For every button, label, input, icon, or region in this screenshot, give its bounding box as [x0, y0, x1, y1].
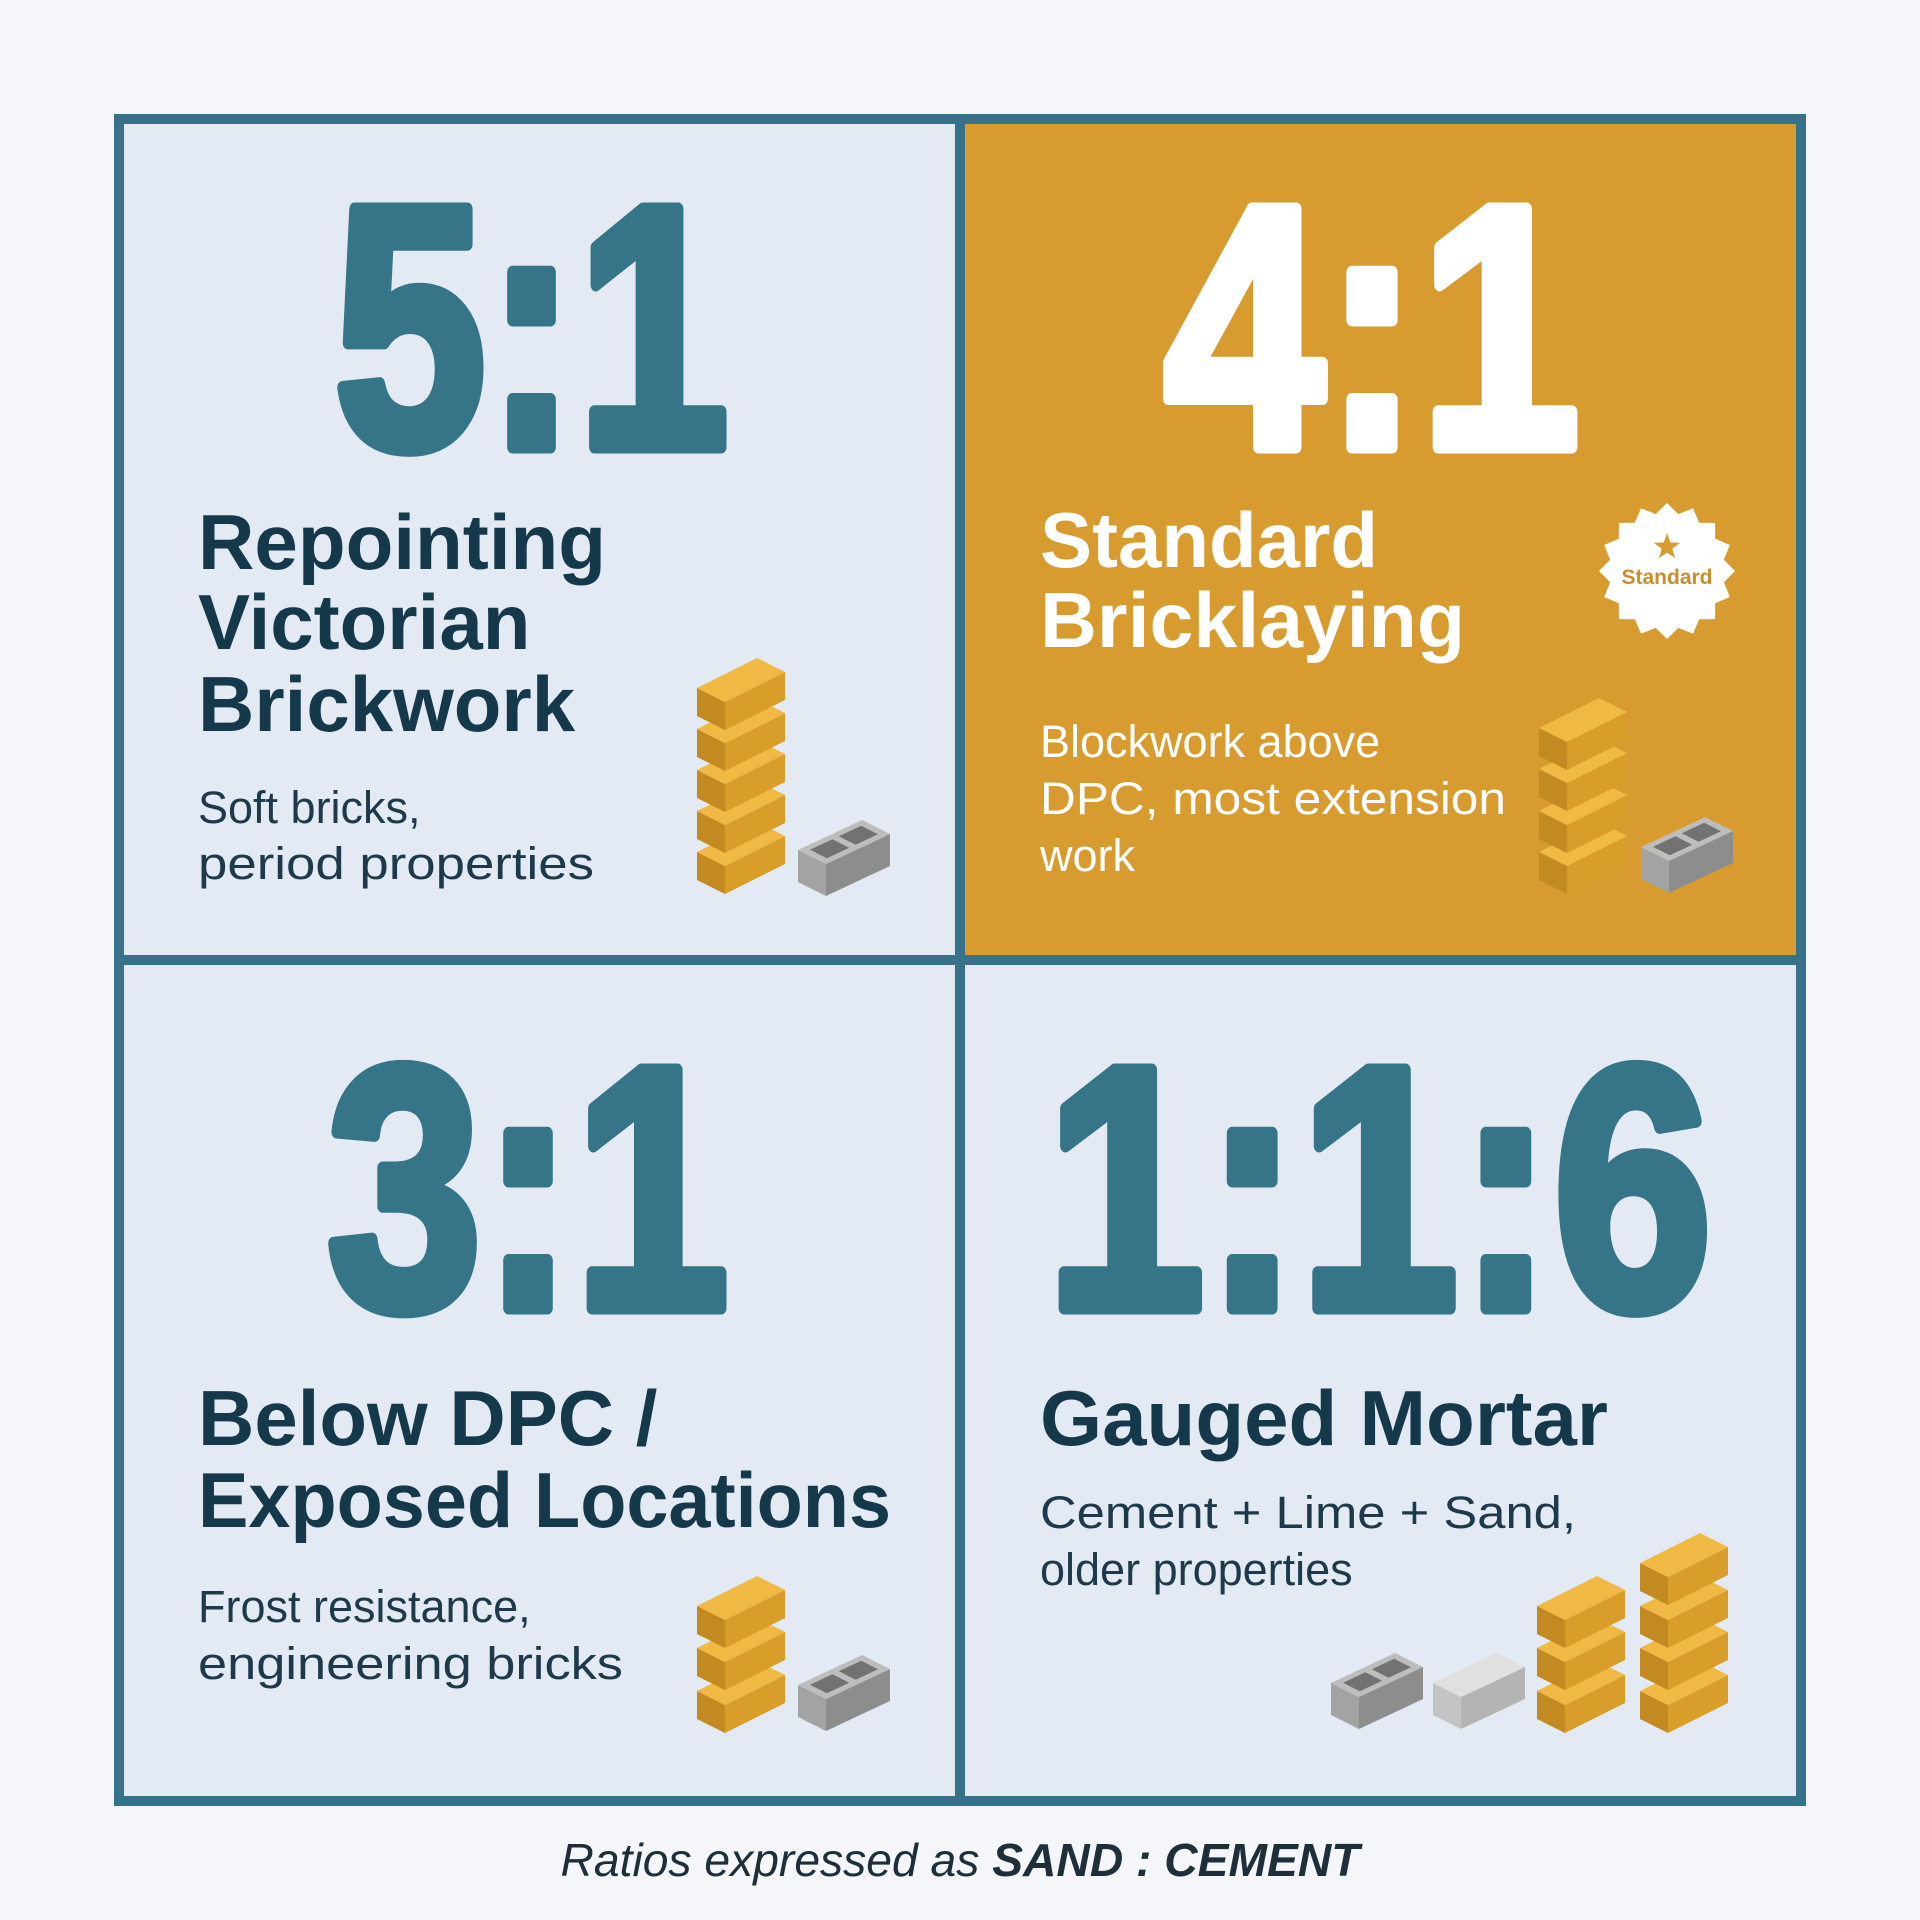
heading: Repointing Victorian Brickwork: Brickwork	[198, 660, 576, 748]
heading: Standard Bricklaying: Standard	[1040, 496, 1378, 584]
ratio 5:1: 5:1	[334, 135, 729, 521]
ratio 4:1: 4:1	[1164, 135, 1580, 521]
badge: Standard	[1599, 503, 1735, 639]
description: work	[1039, 830, 1136, 881]
description: Soft bricks,	[198, 782, 421, 833]
heading: Repointing Victorian Brickwork: Repointing	[198, 498, 606, 586]
description: DPC, most extension	[1040, 773, 1506, 824]
heading: Gauged Mortar: Gauged Mortar	[1040, 1374, 1608, 1462]
panel: 1:1:6 gauged mortar	[1040, 996, 1728, 1733]
description: period properties	[198, 838, 594, 889]
ratio 3:1: 3:1	[327, 996, 729, 1382]
panel: 3:1 below DPC	[198, 996, 891, 1733]
icon: brick stack and block	[1539, 698, 1733, 894]
description: engineering bricks	[198, 1638, 623, 1689]
panel: 4:1 standard bricklaying	[1039, 135, 1735, 894]
description: Cement + Lime + Sand,	[1040, 1487, 1576, 1538]
icon: brick stack and block	[697, 658, 890, 896]
panel: 5:1 repointing	[198, 135, 890, 896]
heading: Repointing Victorian Brickwork: Victorian	[198, 578, 530, 666]
description: Blockwork above	[1040, 716, 1380, 767]
footer note: Ratios expressed as SAND : CEMENT	[560, 1834, 1363, 1886]
heading: Standard Bricklaying: Bricklaying	[1040, 576, 1465, 664]
heading: Below DPC / Exposed Locations: Below DPC /	[198, 1374, 657, 1462]
icon: brick stack and block	[697, 1576, 890, 1733]
ratio 1:1:6: 1:1:6	[1046, 996, 1712, 1382]
heading: Below DPC / Exposed Locations: Exposed Locations	[198, 1456, 891, 1544]
frame	[119, 119, 1801, 1801]
badge: Standard: Standard	[1621, 566, 1713, 589]
description: older properties	[1040, 1544, 1353, 1595]
description: Frost resistance,	[198, 1581, 531, 1632]
icon: blocks and brick stacks	[1331, 1533, 1728, 1733]
